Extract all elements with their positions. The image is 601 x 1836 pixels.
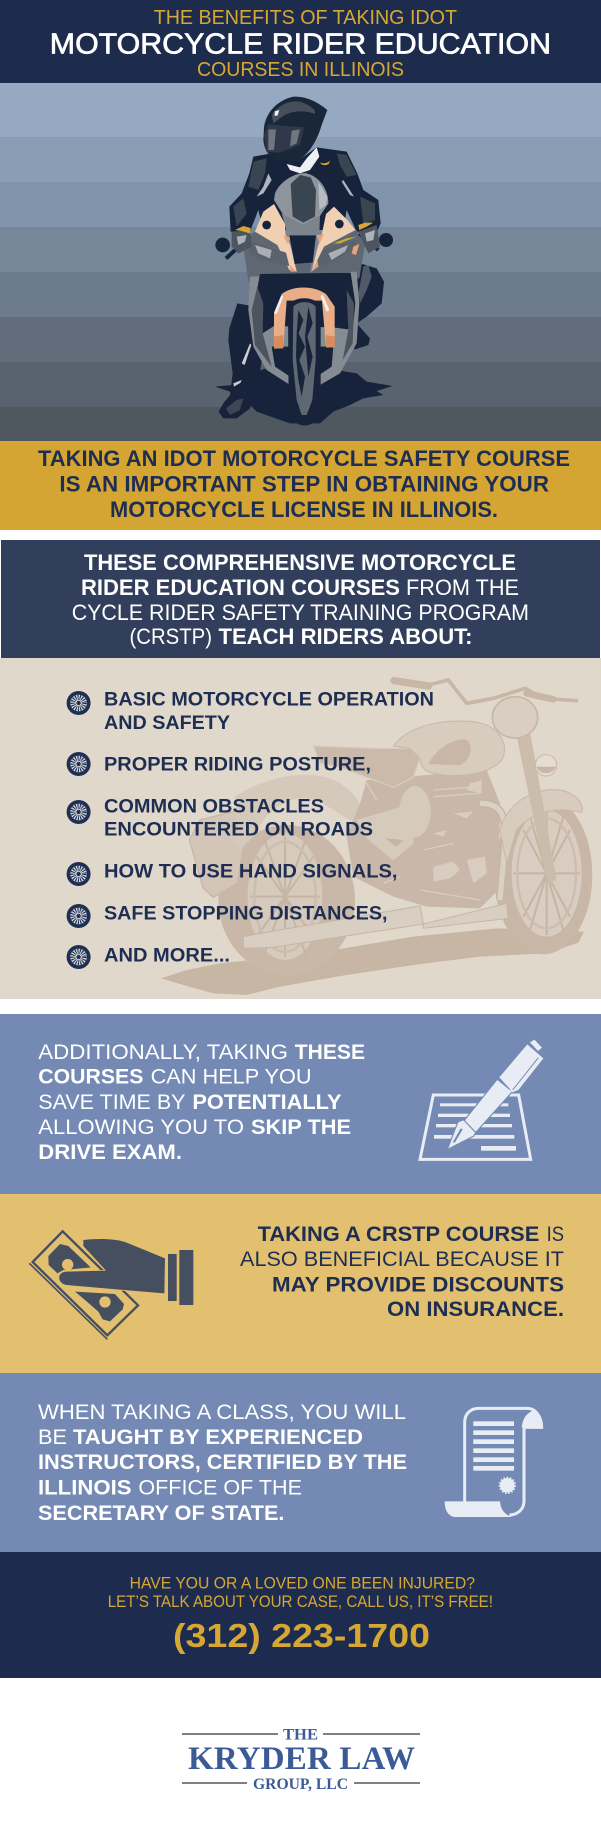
peach fairing panels — [255, 204, 297, 272]
list item: basic operation: AND SAFETY — [104, 712, 230, 734]
text: course description: FROM THE — [406, 575, 519, 600]
text: intro statement: IS AN IMPORTANT STEP IN OBTAINING YOUR — [59, 472, 549, 497]
list item: hand signals: HOW TO USE HAND SIGNALS, — [104, 861, 398, 883]
logo: the Kryder Law Group: GROUP, LLC — [253, 1776, 348, 1793]
text: skip the drive exam: COURSES — [38, 1064, 143, 1089]
text: injured prompt: LET’S TALK ABOUT YOUR CASE, CALL US, IT’S FREE! — [108, 1593, 493, 1611]
icon: wheel bullet — [67, 752, 91, 776]
nose — [289, 235, 316, 264]
panel: call to action footer — [0, 1552, 601, 1678]
lower fairing — [248, 272, 359, 385]
text: skip the drive exam: SAVE TIME BY — [38, 1089, 185, 1114]
handlebars — [394, 681, 428, 686]
text: certified instructors — [38, 1399, 407, 1525]
orange mudguard — [274, 287, 335, 349]
icon: wheel bullet — [67, 800, 91, 824]
text: skip the drive exam: THESE — [295, 1039, 365, 1064]
text: course description: RIDER EDUCATION COURSES — [81, 575, 400, 600]
text: intro statement: TAKING AN IDOT MOTORCYCLE SAFETY COURSE — [38, 446, 570, 471]
list item: common obstacles — [67, 796, 373, 841]
front wheel — [494, 796, 592, 954]
heading line: courses: COURSES IN ILLINOIS — [197, 59, 404, 81]
text: injured prompt — [108, 1574, 493, 1611]
front leg and boot — [219, 303, 263, 418]
frame and engine — [347, 770, 500, 908]
rear leg — [347, 263, 384, 349]
text: certified instructors: INSTRUCTORS, CERTIFIED BY THE — [38, 1449, 407, 1474]
heading line: the benefits: THE BENEFITS OF TAKING IDOT — [154, 7, 457, 29]
icon: wheel bullet — [67, 862, 91, 886]
panel: insurance discounts — [0, 1194, 601, 1373]
logo: the Kryder Law Group — [182, 1726, 420, 1793]
text: skip the drive exam — [38, 1039, 365, 1164]
text: insurance discounts: ALSO BENEFICIAL BECAUSE IT — [240, 1246, 564, 1271]
header pipes — [480, 803, 505, 900]
text: insurance discounts: IS — [547, 1221, 564, 1246]
text: phone number: (312) 223-1700 — [173, 1618, 430, 1655]
exhaust — [243, 906, 423, 948]
heading line: main title: MOTORCYCLE RIDER EDUCATION — [50, 28, 551, 60]
text: skip the drive exam: DRIVE EXAM. — [38, 1139, 182, 1164]
logo: the Kryder Law Group: THE — [283, 1726, 318, 1743]
list item: stopping distances: SAFE STOPPING DISTANCES, — [104, 903, 388, 925]
panel: header title — [0, 0, 601, 83]
rear fender — [230, 775, 362, 850]
text: skip the drive exam: ADDITIONALLY, TAKING — [38, 1039, 288, 1064]
text: insurance discounts — [240, 1221, 564, 1321]
text: course description — [72, 550, 529, 649]
panel: gold intro band — [0, 441, 601, 530]
text: injured prompt: HAVE YOU OR A LOVED ONE BEEN INJURED? — [130, 1574, 475, 1592]
seat — [313, 746, 420, 787]
rear wheel — [218, 825, 355, 975]
list item: basic operation: BASIC MOTORCYCLE OPERATION — [104, 689, 434, 711]
side cover and oil tank — [357, 805, 413, 861]
text: intro statement — [38, 446, 570, 522]
illustration: classic motorcycle watermark — [161, 680, 592, 995]
text: skip the drive exam: POTENTIALLY — [192, 1089, 342, 1114]
icon: wheel bullet — [67, 904, 91, 928]
headlights — [248, 241, 289, 266]
text: skip the drive exam: SKIP THE — [251, 1114, 351, 1139]
side fairing behind headlights — [243, 230, 365, 282]
panel: skip the drive exam — [0, 1014, 601, 1194]
text: insurance discounts: ON INSURANCE. — [387, 1296, 564, 1321]
helmet — [263, 97, 327, 162]
text: course description: TEACH RIDERS ABOUT: — [218, 624, 472, 649]
panel: topics list on beige — [0, 658, 601, 999]
text: insurance discounts: TAKING A CRSTP COURSE — [258, 1221, 539, 1246]
fuel tank — [393, 721, 504, 776]
text: course description: CYCLE RIDER SAFETY TRAINING PROGRAM — [72, 600, 529, 625]
saddlebag — [189, 811, 245, 897]
list item: common obstacles: COMMON OBSTACLES — [104, 796, 324, 818]
panel: striped hero background with rider — [0, 83, 601, 441]
list item: basic operation — [67, 689, 434, 734]
text: certified instructors: ILLINOIS — [38, 1475, 132, 1500]
panel: certified instructors — [0, 1373, 601, 1552]
headlamp and indicator — [492, 697, 538, 738]
text: certified instructors: SECRETARY OF STATE. — [38, 1500, 284, 1525]
list item: and more — [67, 945, 230, 969]
icon: wheel bullet — [67, 945, 91, 969]
list item: riding posture: PROPER RIDING POSTURE, — [104, 754, 371, 776]
text: intro statement: MOTORCYCLE LICENSE IN ILLINOIS. — [110, 497, 498, 522]
gloves, mirrors and handlebar — [215, 238, 230, 252]
text: certified instructors: BE — [38, 1424, 67, 1449]
text: skip the drive exam: ALLOWING YOU TO — [38, 1114, 244, 1139]
text: certified instructors: TAUGHT BY EXPERIENCED — [73, 1424, 363, 1449]
text: course description: THESE COMPREHENSIVE MOTORCYCLE — [84, 550, 516, 575]
torso and arms — [229, 147, 381, 237]
logo: the Kryder Law Group: KRYDER LAW — [188, 1741, 415, 1777]
windshield — [274, 173, 328, 225]
icon: wheel bullet — [67, 691, 91, 715]
panel: navy course description — [1, 540, 600, 658]
icon: pen on paper — [420, 1040, 543, 1159]
list item: and more: AND MORE... — [104, 945, 230, 967]
list item: common obstacles: ENCOUNTERED ON ROADS — [104, 819, 373, 841]
icon: hand holding money — [29, 1231, 193, 1339]
text: certified instructors: WHEN TAKING A CLASS, YOU WILL — [38, 1399, 406, 1424]
illustration: motorcyclist facing viewer — [215, 97, 393, 425]
icon: certificate scroll — [445, 1408, 542, 1517]
text: insurance discounts: MAY PROVIDE DISCOUNTS — [272, 1271, 564, 1296]
front fender and fork — [500, 790, 582, 863]
text: skip the drive exam: CAN HELP YOU — [151, 1064, 312, 1089]
text: certified instructors: OFFICE OF THE — [138, 1475, 302, 1500]
text: course description: (CRSTP) — [130, 624, 212, 649]
front tire — [288, 298, 321, 425]
